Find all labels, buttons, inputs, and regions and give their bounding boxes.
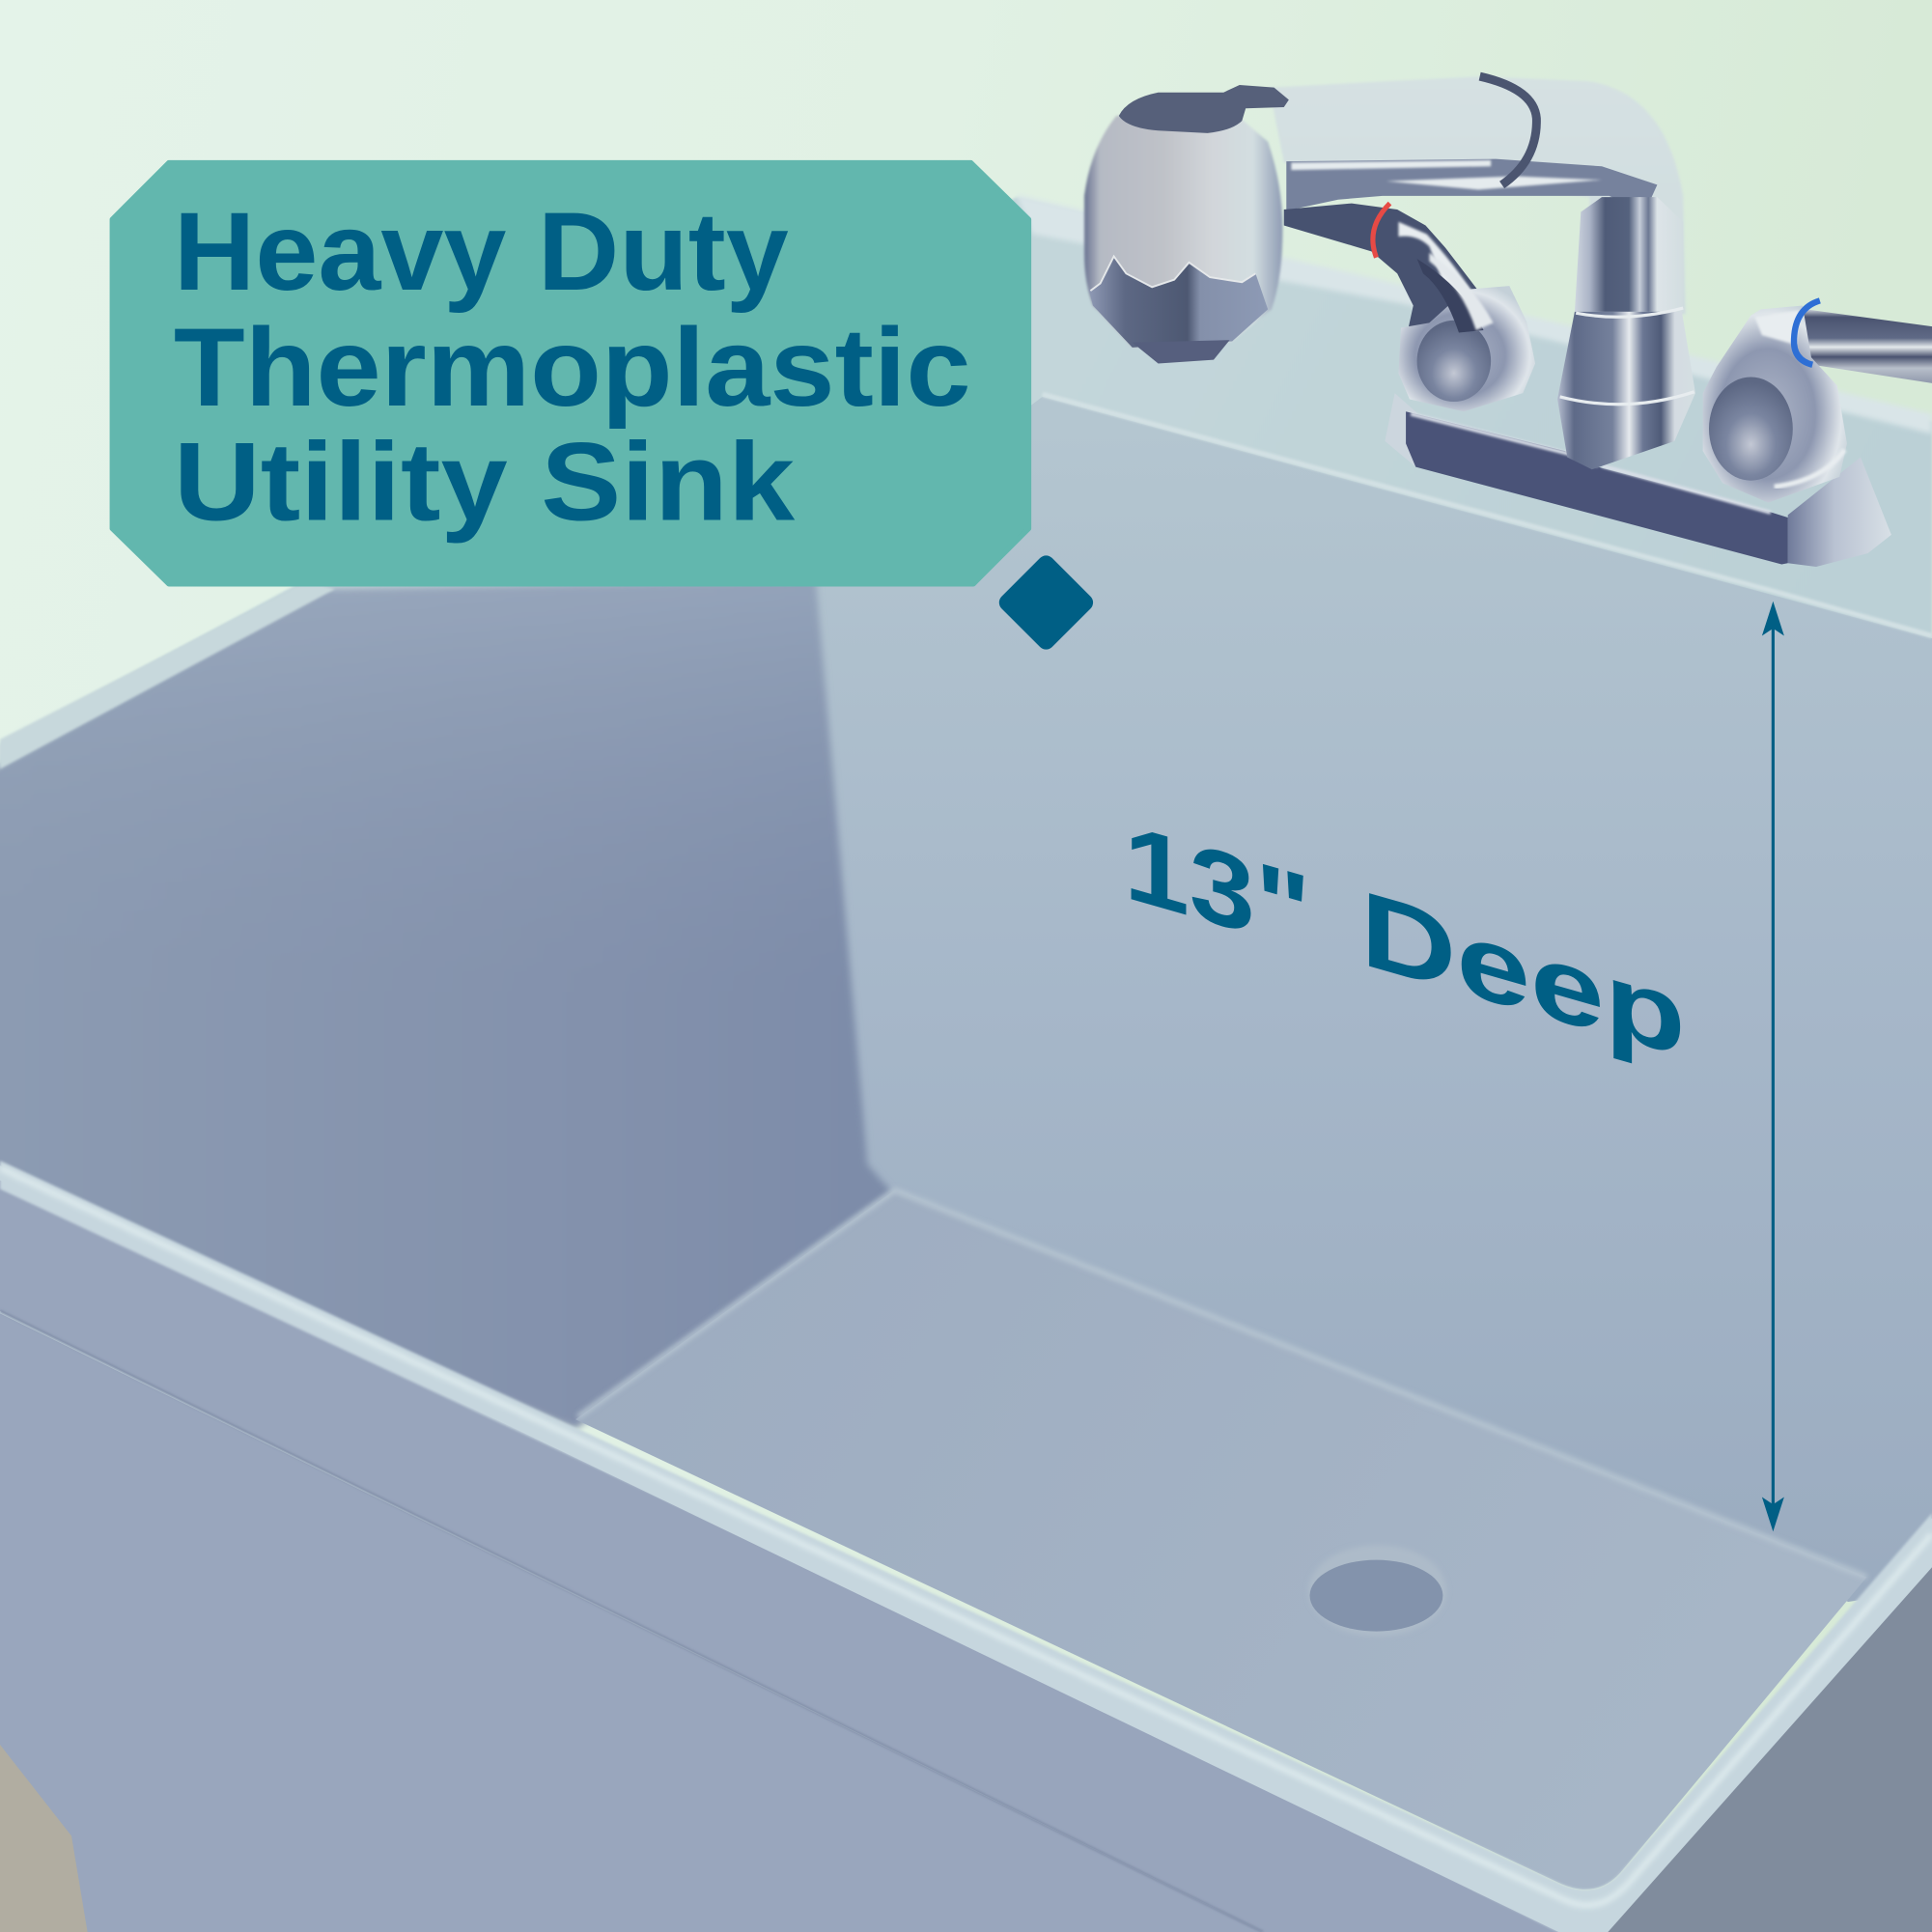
- lever highlight: [1398, 222, 1483, 322]
- floor edge highlight: [578, 1190, 1866, 1577]
- depth label: [1124, 801, 1686, 1079]
- right supply tube: [1797, 308, 1932, 383]
- spray button: [1119, 85, 1289, 133]
- hose band: [1480, 76, 1536, 184]
- decorative diamond marker: [995, 552, 1097, 653]
- spout chrome highlights: [1291, 160, 1602, 190]
- title line 3: Utility Sink: [174, 421, 795, 545]
- floor beneath sink: [0, 1745, 88, 1932]
- left handle dome: [1398, 253, 1535, 411]
- upper neck: [1575, 197, 1683, 312]
- front rim: [0, 1181, 1558, 1932]
- back wall: [789, 397, 1932, 1602]
- spout lower chrome: [1286, 159, 1657, 211]
- front panel: [0, 1313, 1263, 1932]
- right flange: [1788, 457, 1891, 567]
- faucet: [1084, 76, 1932, 567]
- rim bright core: [0, 1168, 1932, 1905]
- lower neck: [1557, 312, 1695, 469]
- badge shape: [112, 162, 1029, 584]
- back lip highlight: [1017, 195, 1932, 434]
- sink back deck: [0, 197, 1932, 789]
- drain: [1308, 1545, 1446, 1637]
- neck rings: [1560, 308, 1694, 405]
- depth label: Deep: [1360, 868, 1686, 1079]
- red ring: [1373, 204, 1389, 258]
- inner edge highlight: [1043, 394, 1932, 635]
- front panel groove: [0, 1311, 1263, 1932]
- spray head lower chrome: [1089, 256, 1268, 348]
- base plate highlight: [1411, 414, 1771, 513]
- left supply tube and lever: [1284, 204, 1513, 357]
- rim highlight band: [0, 1161, 1932, 1932]
- spray nozzle: [1133, 340, 1230, 363]
- depth arrow: [1762, 602, 1784, 1531]
- title line 1: Heavy Duty: [174, 190, 789, 314]
- title badge: [112, 162, 1029, 584]
- title line 2: Thermoplastic: [174, 306, 971, 430]
- right handle dome: [1703, 305, 1847, 503]
- left rim edge: [0, 581, 335, 769]
- scallop outline: [1090, 256, 1255, 291]
- depth label: 13": [1124, 801, 1311, 973]
- rim base: [0, 1165, 1932, 1932]
- basin floor: [575, 1190, 1866, 1890]
- left flange: [1385, 393, 1417, 467]
- pull-out spray head: [1084, 85, 1289, 363]
- base plate: [1406, 411, 1788, 564]
- right outer side: [1608, 1567, 1932, 1932]
- spout arm: [1269, 76, 1686, 314]
- blue ring: [1794, 300, 1820, 365]
- left wall: [0, 579, 894, 1429]
